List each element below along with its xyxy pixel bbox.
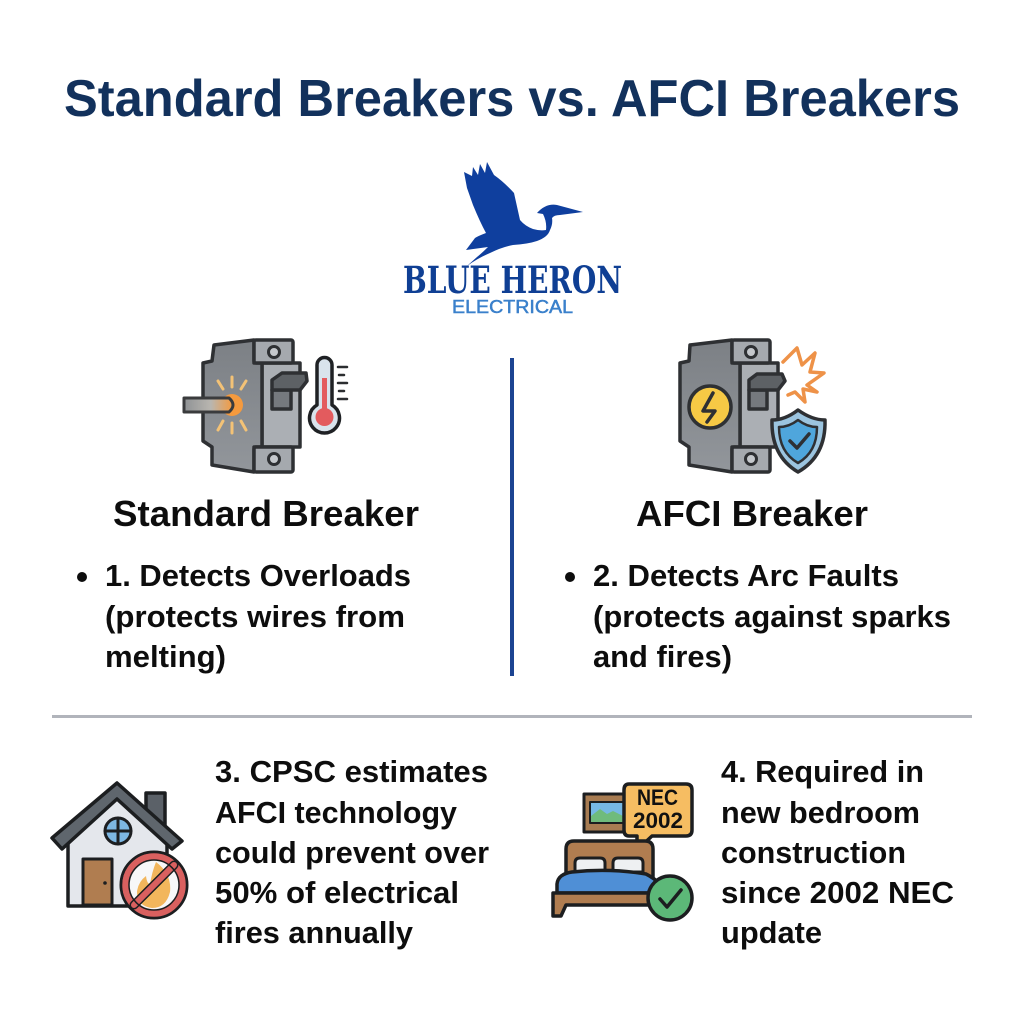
speech bubble — [624, 784, 692, 850]
wire — [184, 398, 233, 412]
terminals — [732, 340, 770, 472]
spark — [783, 348, 824, 402]
logo: Blue Heron Electrical — [403, 162, 622, 317]
picture frame — [584, 794, 628, 832]
breaker toggle — [749, 374, 785, 409]
icon: AFCI breaker with spark and shield — [680, 340, 825, 472]
terminals — [254, 340, 293, 472]
text block: NEC requirement: update — [721, 916, 822, 950]
bullet text: (protects wires from — [105, 600, 405, 634]
glow — [218, 377, 246, 433]
bed frame — [553, 893, 655, 916]
bullet text — [593, 559, 951, 674]
bullet text: and fires) — [593, 640, 732, 674]
panel: AFCI breaker — [565, 493, 951, 674]
horizontal divider — [52, 715, 972, 718]
heading: Standard Breaker — [113, 493, 419, 534]
title: Standard Breakers vs. AFCI Breakers — [64, 70, 960, 128]
thermometer — [310, 358, 347, 433]
icon: heron silhouette — [464, 162, 583, 266]
bullet text — [105, 559, 411, 674]
icon: standard breaker with hot wire and thermometer — [184, 340, 347, 472]
breaker right section — [262, 363, 300, 447]
bullet — [565, 572, 575, 582]
text block: NEC requirement: new bedroom — [721, 796, 920, 830]
text block: CPSC estimate: AFCI technology — [215, 796, 457, 830]
no-fire sign — [121, 852, 187, 918]
bullet text: (protects against sparks — [593, 600, 951, 634]
icon: house with no-fire sign — [52, 783, 187, 918]
bullet text: 2. Detects Arc Faults — [593, 559, 899, 593]
pillows — [575, 858, 643, 872]
logo subtitle: ELECTRICAL — [452, 297, 573, 317]
text block: NEC requirement: 4. Required in — [721, 755, 924, 789]
text block: CPSC estimate: fires annually — [215, 916, 413, 950]
text block: CPSC estimate: 50% of electrical — [215, 876, 459, 910]
roof — [52, 783, 182, 849]
text block: CPSC estimate: could prevent over — [215, 836, 489, 870]
shield — [772, 410, 825, 472]
text block: NEC requirement: construction — [721, 836, 906, 870]
speech bubble: 2002 — [633, 808, 683, 833]
bullet text: melting) — [105, 640, 226, 674]
headboard — [566, 841, 653, 880]
breaker body — [203, 340, 262, 472]
walls — [68, 797, 167, 906]
heading: AFCI Breaker — [636, 493, 868, 534]
window — [105, 818, 131, 844]
text block: CPSC estimate: 3. CPSC estimates — [215, 755, 488, 789]
text block: NEC requirement: since 2002 NEC — [721, 876, 954, 910]
bullet — [77, 572, 87, 582]
breaker body — [680, 340, 740, 472]
breaker right section — [740, 363, 778, 447]
lightning badge — [689, 386, 731, 428]
logo wordmark: BLUE HERON — [403, 258, 622, 302]
speech bubble: NEC — [637, 785, 678, 810]
check badge — [648, 876, 692, 920]
icon: bed with NEC 2002 bubble — [553, 784, 692, 920]
bullet text: 1. Detects Overloads — [105, 559, 411, 593]
vertical divider — [510, 358, 514, 676]
panel: standard breaker — [77, 493, 419, 674]
door — [83, 859, 112, 905]
text block: NEC requirement — [721, 755, 954, 950]
blanket — [557, 870, 660, 893]
text block: CPSC estimate — [215, 755, 489, 950]
breaker toggle — [272, 373, 307, 409]
chimney — [146, 793, 165, 825]
